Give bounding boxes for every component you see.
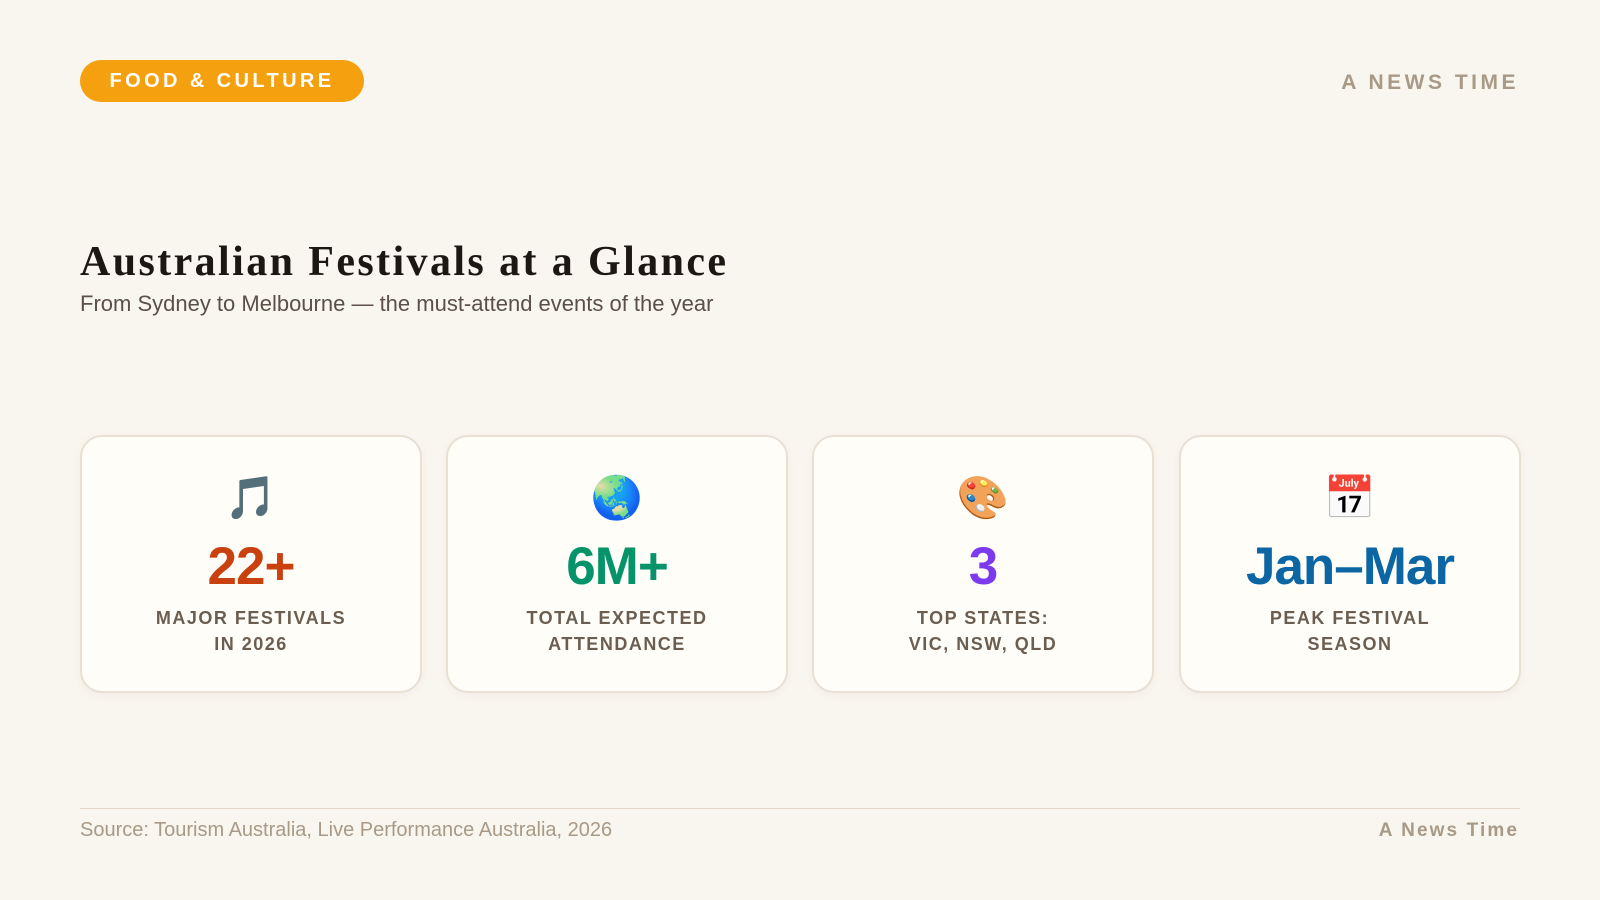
subtitle: From Sydney to Melbourne — the must-attend events of the year (80, 291, 713, 316)
stat label: SEASON (1307, 634, 1393, 654)
icon: palette: 🎨 (957, 474, 1009, 521)
stat number: Jan–Mar (1246, 537, 1454, 596)
stat label (156, 608, 346, 654)
stat label (1270, 608, 1430, 654)
stat number: 6M+ (566, 537, 668, 596)
source: Source: Tourism Australia, Live Performance Australia, 2026 (80, 819, 612, 841)
icon: music note: 🎵 (225, 474, 277, 521)
category pill: FOOD & CULTURE (110, 70, 334, 92)
stat number: 3 (969, 537, 997, 596)
card: attendance (446, 435, 788, 693)
card: festivals (80, 435, 422, 693)
icon: globe: 🌏 (591, 474, 643, 521)
stat number: 22+ (208, 537, 294, 596)
stat label: TOTAL EXPECTED (526, 608, 708, 628)
stat label: IN 2026 (214, 634, 288, 654)
stat label: MAJOR FESTIVALS (156, 608, 346, 628)
title: Australian Festivals at a Glance (80, 239, 728, 285)
stat label: VIC, NSW, QLD (909, 634, 1057, 654)
stat label: ATTENDANCE (548, 634, 686, 654)
icon: calendar: 📅 (1324, 474, 1376, 521)
card: season (1179, 435, 1521, 693)
stat label (908, 608, 1057, 654)
stat label: TOP STATES: (917, 608, 1049, 628)
footer brand: A News Time (1379, 820, 1519, 841)
stat label (526, 608, 708, 654)
card: states (812, 435, 1154, 693)
stat label: PEAK FESTIVAL (1270, 608, 1430, 628)
category pill (80, 60, 364, 102)
brand: A NEWS TIME (1341, 71, 1519, 94)
